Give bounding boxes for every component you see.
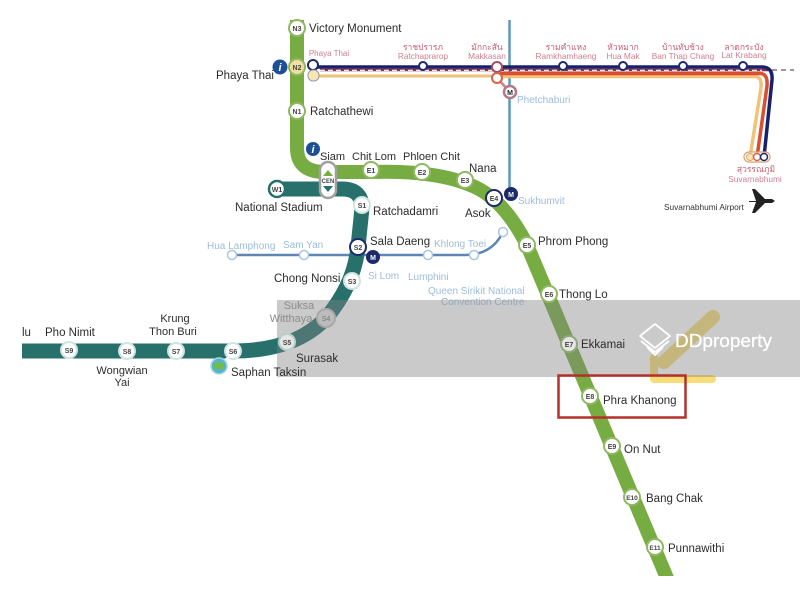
Sukhumvit green line [297,10,672,590]
green line stations: N3 [293,26,302,33]
CEN interchange station [320,162,336,198]
MRT vertical blue line [508,20,511,195]
Silom light blue line [228,228,508,260]
light blue labels: Si Lom [368,271,399,282]
teal line stations: S3 [348,279,356,286]
green line stations: E3 [461,178,469,185]
light blue labels: Phetchaburi [517,95,570,106]
black station labels: Phloen Chit [403,151,460,163]
light blue labels: Queen Sirikit National [428,286,525,297]
black station labels: Pho Nimit [45,327,96,339]
green line stations: E11 [649,545,661,552]
black station labels: Phaya Thai [216,70,274,82]
teal line stations: S9 [65,348,73,355]
black station labels: On Nut [624,444,661,456]
rail link labels: Lat Krabang [721,50,767,60]
airport label: Suvarnabhumi Airport [664,202,744,212]
teal line stations: S7 [172,349,180,356]
rail link labels: ลาดกระบัง [724,42,764,52]
green line stations: E8 [586,394,594,401]
black station labels: Bang Chak [646,493,703,505]
green line stations [289,20,663,555]
airplane icon [749,189,775,213]
black station labels: Punnawithi [668,543,724,555]
grey Suksa Witthaya label: Witthaya [270,313,313,325]
MRT interchange icons: M [507,90,513,97]
green line stations: N2 [293,65,302,72]
black station labels: National Stadium [235,202,323,214]
black station labels: Wongwian [96,365,148,377]
MRT interchange icons: M [508,192,514,199]
yellow arrow annotation [654,317,713,379]
black station labels: Sala Daeng [370,236,430,248]
green line stations: E7 [565,342,573,349]
green line stations: E6 [545,292,553,299]
light blue labels: Sam Yan [283,240,323,251]
rail link labels: ราชปรารภ [403,42,443,52]
rail link labels: มักกะสัน [471,42,503,52]
teal line stations: S6 [229,349,237,356]
light blue labels: Convention Centre [441,297,525,308]
green line stations: N1 [293,109,302,116]
black station labels: Saphan Taksin [231,367,306,379]
green line stations: E2 [418,170,426,177]
grey watermark band [277,300,800,377]
black station labels: Surasak [296,353,338,365]
black station labels: Phra Khanong [603,395,677,407]
green line stations: E1 [367,168,375,175]
rail link labels [309,42,782,184]
MRT interchange icons [366,86,518,264]
teal line stations: S1 [358,203,366,210]
grey Suksa Witthaya label [270,300,315,325]
light blue labels: Khlong Toei [434,239,486,250]
green line stations: E9 [608,444,616,451]
black station labels: Krung [160,313,190,325]
black station labels: Victory Monument [309,23,402,35]
black station labels: Thong Lo [559,289,608,301]
CEN interchange station: CEN [322,179,334,185]
light blue labels [207,95,570,308]
black station labels: Ekkamai [581,339,625,351]
Airport rail link lines [313,67,794,157]
black station labels: Thon Buri [149,326,197,338]
teal line stations: S5 [283,340,291,347]
light blue labels: Hua Lamphong [207,241,275,252]
rail link labels: Suvarnabhumi [728,174,782,184]
black station labels [22,23,724,555]
rail link labels: Ratchaprarop [398,51,449,61]
black station labels: Phrom Phong [538,236,608,248]
grey Suksa Witthaya label: Suksa [284,300,315,312]
rail link labels: Ban Thap Chang [652,51,715,61]
Silom dark teal line [22,189,362,351]
rail link labels: Makkasan [468,51,506,61]
teal line stations: W1 [272,187,282,194]
river boat icon [211,355,231,374]
highlight box: Phra Khanong [558,376,686,418]
green line stations: E5 [523,243,531,250]
rail link labels: บ้านทับช้าง [662,42,704,52]
black station labels: Ratchadamri [373,206,438,218]
green line stations: E4 [490,196,498,203]
rail link labels: Phaya Thai [309,49,349,58]
black station labels: Yai [114,377,130,389]
teal line stations: S4 [322,316,330,323]
DDproperty logo [640,324,772,355]
rail link labels: Ramkhamhaeng [536,51,597,61]
MRT interchange icons: M [370,255,376,262]
black station labels: Chong Nonsi [274,273,340,285]
black station labels: Siam [320,151,345,163]
teal line stations: S8 [123,349,131,356]
rail link labels: สุวรรณภูมิ [737,164,775,175]
DDproperty logo: DDproperty [675,331,772,351]
rail link labels: หัวหมาก [607,42,639,52]
teal line stations [61,181,370,359]
black station labels: Asok [465,208,491,220]
rail link labels: รามคำแหง [546,42,586,52]
information icons: i [278,62,282,74]
black station labels: Ratchathewi [310,106,373,118]
light blue labels: Sukhumvit [518,196,565,207]
black station labels: lu [22,327,31,339]
rail link labels: Hua Mak [606,51,640,61]
black station labels: Chit Lom [352,151,396,163]
light blue labels: Lumphini [408,272,449,283]
information icons: i [311,144,315,156]
teal line stations: S2 [354,245,362,252]
black station labels: Nana [469,163,497,175]
information icons [272,60,320,156]
rail link stations [308,60,770,162]
green line stations: E10 [626,495,638,502]
